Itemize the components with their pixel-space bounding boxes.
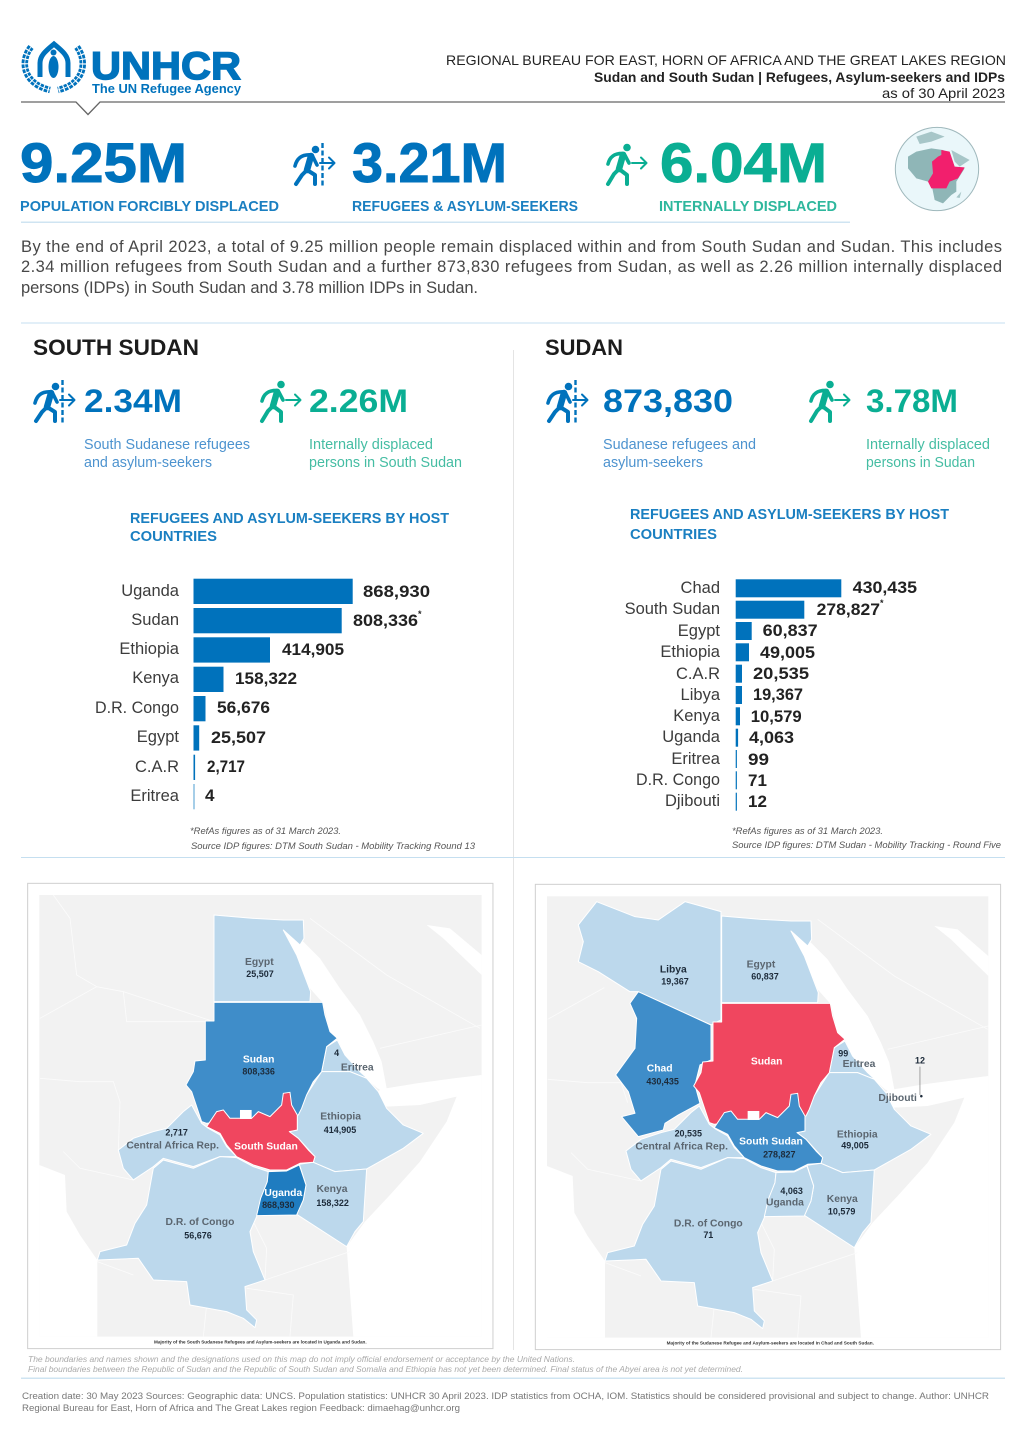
footer credits: Regional Bureau for East, Horn of Africa and The Great Lakes region Feedback: dimaehag@unhcr.org [22,1403,460,1414]
footer credits [22,1391,989,1414]
stat: South Sudan IDPs [309,383,462,471]
chart heading: Sudan host countries: COUNTRIES [630,527,717,543]
bar chart: Sudan refugees by host country: * [880,598,884,608]
bar chart: Sudan refugees by host country: Libya [681,686,721,704]
bar chart: South Sudan refugees by host country: Egypt [137,728,179,746]
kpi: refugees and asylum-seekers: REFUGEES & ASYLUM-SEEKERS [352,198,578,215]
bar chart: Sudan refugees by host country: C.A.R [676,665,720,683]
bar chart: Sudan refugees by host country: 19,367 [753,685,803,704]
map labels: Uganda [766,1198,804,1209]
bar chart: Sudan refugees by host country: 278,827 [817,600,880,619]
bar chart: South Sudan refugees by host country: 25,507 [211,728,266,747]
panel: Sudan map [535,884,1001,1350]
header: report title block: Sudan and South Sudan | Refugees, Asylum-seekers and IDPs [594,69,1005,85]
footnote: Sudan sources: Source IDP figures: DTM Sudan - Mobility Tracking - Round Five [732,840,1001,851]
footnote: Sudan sources: *RefAs figures as of 31 March 2023. [732,826,883,837]
stat: South Sudan refugees: 2.34M [84,383,182,419]
country: Kenya [297,1162,367,1247]
stat: Sudanese refugees: Sudanese refugees and [603,437,756,453]
icon: internally displaced person [608,144,646,184]
stat: South Sudan refugees: and asylum-seekers [84,455,212,471]
country: Uganda [764,1166,814,1217]
bar chart: Sudan refugees by host country: 430,435 [853,578,917,597]
map labels: • [920,1091,923,1101]
icon: South Sudan refugees [35,380,74,423]
map labels: D.R. of Congo [674,1218,743,1229]
map labels: 12 [915,1056,925,1066]
map labels [126,957,374,1241]
stat: Sudanese refugees: asylum-seekers [603,455,703,471]
country: Central African Republic [626,1106,744,1181]
map labels [635,960,925,1240]
icon: South Sudan IDPs [262,381,300,421]
country: South Sudan [714,1093,823,1171]
kpi: internally displaced [659,131,837,215]
map labels: 10,579 [828,1206,855,1216]
stat: Sudan IDPs: Internally displaced [866,437,990,453]
map labels: Central Africa Rep. [635,1142,728,1153]
kpi: population forcibly displaced: POPULATION FORCIBLY DISPLACED [20,198,279,215]
chart heading: Sudan host countries: REFUGEES AND ASYLUM-SEEKERS BY HOST [630,507,949,523]
country: Uganda [257,1165,306,1216]
bar chart: South Sudan refugees by host country: Uganda [121,582,180,600]
map labels: Eritrea [843,1059,876,1070]
stat: Sudan IDPs [866,383,990,471]
intro paragraph [21,238,1002,297]
bar chart: Sudan refugees by host country: Kenya [673,707,721,725]
country: Egypt [722,916,818,1003]
bar chart: Sudan refugees by host country: South Sudan [625,600,720,618]
chart heading: South Sudan host countries [130,511,449,545]
country: Libya [578,902,721,1025]
country: Eritrea [829,1041,886,1089]
chart heading: South Sudan host countries: REFUGEES AND ASYLUM-SEEKERS BY HOST [130,511,449,527]
chart heading: South Sudan host countries: COUNTRIES [130,529,217,545]
icon: UNHCR wreath and shelter emblem [25,44,83,90]
map labels: 25,507 [246,969,274,979]
bar chart: South Sudan refugees by host country: C.A.R [135,758,179,776]
header: UNHCR logo [25,44,242,96]
map labels: D.R. of Congo [166,1217,234,1228]
kpi: refugees and asylum-seekers: 3.21M [352,131,507,194]
map labels: 2,717 [165,1127,188,1137]
country: Sudan [694,1003,845,1124]
bar chart: Sudan refugees by host country: 4,063 [749,728,794,747]
bar chart: Sudan refugees by host country: 10,579 [751,707,802,726]
bar chart: South Sudan refugees by host country: 808,336 [353,611,418,630]
stat: Sudan IDPs: 3.78M [866,383,958,419]
intro paragraph: By the end of April 2023, a total of 9.25 million people remain displaced within and from South Sudan and Sudan. This includes [21,238,1002,256]
stat: South Sudan IDPs: 2.26M [309,383,408,419]
map labels: South Sudan [739,1137,803,1148]
kpi: internally displaced: INTERNALLY DISPLACED [659,198,837,215]
map labels: 20,535 [675,1129,702,1139]
icon: Sudan IDPs [811,381,850,421]
bar chart: South Sudan refugees by host country: 414,905 [282,640,344,659]
stat: Sudan IDPs: persons in Sudan [866,455,975,471]
map labels: 414,905 [324,1125,356,1135]
map labels: 49,005 [841,1141,869,1151]
bar chart: South Sudan refugees by host country [95,579,430,809]
country: Sudan [186,1002,337,1123]
map labels: Uganda [264,1188,302,1199]
map labels: Egypt [747,960,776,971]
map labels: 278,827 [763,1149,796,1159]
kpi: refugees and asylum-seekers [352,131,578,215]
map labels: Ethiopia [320,1111,361,1122]
bar chart: Sudan refugees by host country: 49,005 [760,643,815,662]
stat: South Sudan refugees [84,383,250,471]
map disclaimer: Final boundaries between the Republic of Sudan and the Republic of South Sudan and Somalia and Ethiopia has not yet been determined. Final status of the Abyei area is not yet determined. [28,1364,743,1374]
icon: refugee crossing border [295,143,334,186]
map labels: 99 [838,1048,848,1058]
panel: South Sudan map [28,883,493,1349]
stat: Sudanese refugees [603,383,756,471]
map disclaimer: The boundaries and names shown and the designations used on this map do not imply official endorsement or acceptance by the United Nations. [28,1354,575,1364]
bar chart: South Sudan refugees by host country: Sudan [131,611,179,629]
bar chart: South Sudan refugees by host country: Kenya [132,669,180,687]
logo tagline: The UN Refugee Agency [92,81,242,96]
Djibouti leader line [919,1067,921,1095]
header: report title block: REGIONAL BUREAU FOR EAST, HORN OF AFRICA AND THE GREAT LAKES REGION [446,52,1006,68]
map labels: Chad [647,1064,673,1075]
logo wordmark: UNHCR [91,45,241,88]
bar chart: Sudan refugees by host country: 71 [748,771,767,790]
map labels: South Sudan [234,1141,298,1152]
header: report title block: as of 30 April 2023 [882,85,1005,101]
country: Central African Republic [118,1105,237,1180]
bar chart: Sudan refugees by host country: D.R. Congo [636,771,720,789]
map disclaimer [28,1354,743,1374]
bar chart: South Sudan refugees by host country: Ethiopia [119,640,180,658]
intro paragraph: 2.34 million refugees from South Sudan and a further 873,830 refugees from Sudan, as well as 2.26 million internally displaced [21,258,1002,276]
kpi: population forcibly displaced: 9.25M [20,131,187,194]
map labels: Libya [660,964,687,975]
map labels: 4 [334,1048,339,1058]
country: Kenya [804,1163,874,1248]
footer credits: Creation date: 30 May 2023 Sources: Geographic data: UNCS. Population statistics: UNHCR 30 April 2023. IDP statistics from OCHA, IOM. Statistics should be considered provisional and subject to change. Author: UNHCR [22,1391,989,1402]
country: Ethiopia [289,1072,423,1172]
header rule with notch [21,102,1005,114]
country: DR Congo [97,1157,268,1328]
bar chart: South Sudan refugees by host country: 4 [205,786,215,805]
chart heading: Sudan host countries [630,507,949,543]
heading: Sudan: SUDAN [545,335,623,360]
map note: Majority of the South Sudanese Refugees and Asylum-seekers are located in Uganda and Sudan. [154,1340,367,1345]
bar chart: Sudan refugees by host country: 12 [748,792,767,811]
country: South Sudan [207,1092,315,1170]
bar chart: Sudan refugees by host country: Eritrea [671,750,721,768]
map note: Majority of the Sudanese Refugee and Asylum-seekers are located in Chad and South Sudan. [667,1341,874,1346]
stat: South Sudan refugees: South Sudanese refugees [84,437,250,453]
country: Ethiopia [797,1073,931,1173]
bar chart: Sudan refugees by host country: Ethiopia [660,643,721,661]
map labels: Sudan [243,1054,274,1065]
bar chart: Sudan refugees by host country [625,578,917,811]
bar chart: Sudan refugees by host country: Djibouti [665,792,720,810]
footnote: South Sudan sources: Source IDP figures: DTM South Sudan - Mobility Tracking Round 13 [191,841,476,852]
map labels: Kenya [827,1194,858,1205]
bar chart: South Sudan refugees by host country: 868,930 [363,582,430,601]
bar chart: South Sudan refugees by host country: 56,676 [217,698,270,717]
stat: South Sudan IDPs: Internally displaced [309,437,433,453]
bar chart: South Sudan refugees by host country: D.R. Congo [95,699,179,717]
country: DR Congo [605,1158,776,1329]
kpi divider [21,222,850,223]
intro paragraph: persons (IDPs) in South Sudan and 3.78 million IDPs in Sudan. [21,279,478,297]
map labels: 71 [703,1230,713,1240]
map labels: Egypt [245,957,274,968]
map labels: 19,367 [661,976,689,986]
footnote: Sudan sources [732,826,1001,851]
bar chart: South Sudan refugees by host country: Eritrea [130,787,180,805]
bar chart: Sudan refugees by host country: 20,535 [753,664,809,683]
bar chart: Sudan refugees by host country: Uganda [662,728,721,746]
map labels: 4,063 [780,1186,803,1196]
map labels: 56,676 [184,1231,212,1241]
header: report title block [446,52,1006,101]
map labels: Central Africa Rep. [126,1140,219,1151]
map labels: Kenya [316,1184,348,1195]
bar chart: South Sudan refugees by host country: 158,322 [235,669,297,688]
country: Egypt [214,915,311,1002]
map labels: 158,322 [316,1198,349,1208]
map labels: 868,930 [262,1200,295,1210]
bar chart: South Sudan refugees by host country: 2,717 [207,757,245,776]
map labels: Ethiopia [837,1129,878,1140]
bar chart: South Sudan refugees by host country: * [418,609,422,619]
bar chart: Sudan refugees by host country: 99 [748,750,769,769]
stat: Sudanese refugees: 873,830 [603,383,733,419]
map labels: 430,435 [646,1076,679,1086]
icon: Sudanese refugees [548,380,588,423]
kpi: internally displaced: 6.04M [660,131,827,194]
heading: South Sudan: SOUTH SUDAN [33,335,199,360]
country: Eritrea [322,1040,378,1088]
footnote: South Sudan sources [190,826,476,852]
map labels: 808,336 [242,1066,275,1076]
map labels: Sudan [751,1056,782,1067]
country: Chad [616,992,711,1137]
bar chart: Sudan refugees by host country: Chad [681,579,720,597]
icon: globe locator [895,127,979,211]
map labels: Djibouti [878,1093,917,1104]
map labels: Eritrea [341,1063,374,1074]
kpi: population forcibly displaced [20,131,279,215]
footnote: South Sudan sources: *RefAs figures as of 31 March 2023. [190,826,341,837]
bar chart: Sudan refugees by host country: Egypt [678,622,720,640]
bar chart: Sudan refugees by host country: 60,837 [763,621,818,640]
stat: South Sudan IDPs: persons in South Sudan [309,455,462,471]
map labels: 60,837 [751,972,779,982]
